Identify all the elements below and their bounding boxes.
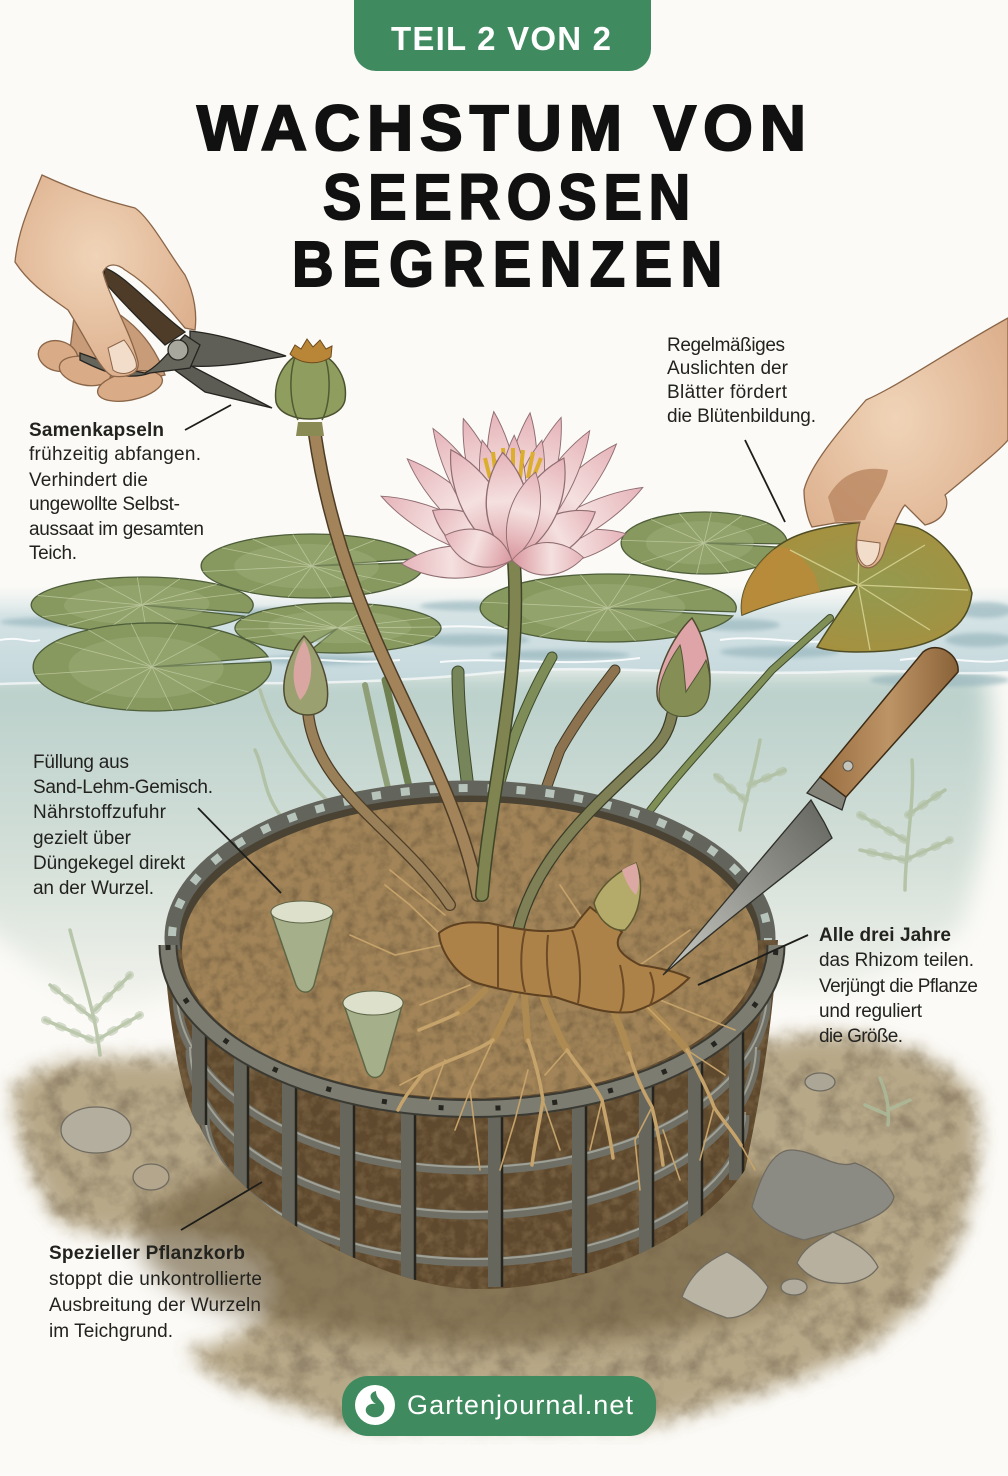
pond floor wash [13,1035,977,1425]
text: Rhizom: die Größe. [819,1026,903,1047]
gold lily leaf [741,522,972,652]
basket back rim [172,788,768,1088]
footer badge [342,1376,656,1436]
text: Samenkapseln [29,420,204,564]
water surface band [0,585,1008,687]
text: Auslichten: Regelmäßiges [667,335,785,356]
text: Auslichten: Auslichten der [667,358,789,379]
text: Pflanzkorb: Spezieller Pflanzkorb [49,1243,245,1264]
left flower bud [284,636,328,715]
title: SEEROSEN [323,161,690,233]
text: Samenkapseln: frühzeitig abfangen. [29,444,201,465]
text: Samenkapseln: ungewollte Selbst- [29,494,180,515]
text: Samenkapseln: aussaat im gesamten [29,519,204,540]
roots [350,870,755,1190]
underwater wash [0,672,991,1004]
hand [15,175,196,377]
left hand with secateurs [15,175,286,408]
text: Rhizom [819,925,978,1047]
text: Füllung: Nährstoffzufuhr [33,802,167,823]
main stems [308,435,672,930]
right hand [804,318,1008,568]
title: WACHSTUM VON [197,92,806,164]
rhizome [439,863,689,1013]
text: Füllung: an der Wurzel. [33,878,154,899]
text: Samenkapseln: Verhindert die [29,470,148,491]
back stems [365,618,830,903]
basket wall [164,940,778,1289]
text: Pflanzkorb [49,1243,262,1342]
lily pads [0,509,794,718]
text: Pflanzkorb: Ausbreitung der Wurzeln [49,1295,261,1316]
right flower bud [657,618,710,717]
fertiliser cones [271,901,403,1078]
thumbnail [108,340,136,374]
basket front rim [168,945,776,1109]
text: Rhizom: das Rhizom teilen. [819,950,974,971]
text: Füllung: Düngekegel direkt [33,853,186,874]
text: Rhizom: und reguliert [819,1001,923,1022]
water lily flower [375,410,650,580]
text: Füllung [33,752,213,899]
basket bars [177,992,767,1287]
text: Rhizom: Verjüngt die Pflanze [819,976,978,997]
stones [61,1073,894,1318]
text: Auslichten: Blätter fördert [667,382,788,403]
thumbnail [857,540,880,566]
text: Pflanzkorb: im Teichgrund. [49,1321,173,1342]
text: Füllung: Füllung aus [33,752,129,773]
text: Pflanzkorb: stoppt die unkontrollierte [49,1269,262,1290]
icon: logo [355,1385,395,1425]
top badge [354,0,651,71]
shaded palm hollow [828,469,888,522]
leader lines [181,405,808,1230]
text: Samenkapseln: Teich. [29,543,77,564]
knife [663,648,958,975]
soil surface [182,802,758,1098]
text: Füllung: gezielt über [33,828,132,849]
planting basket [164,788,778,1289]
text: Rhizom: Alle drei Jahre [819,925,951,946]
secateurs [80,268,286,408]
footer badge: Gartenjournal.net [407,1390,633,1420]
title [197,92,806,300]
text: Samenkapseln: Samenkapseln [29,420,164,441]
text: Füllung: Sand-Lehm-Gemisch. [33,777,213,798]
text: Auslichten [667,335,816,427]
text: Auslichten: die Blütenbildung. [667,406,816,427]
title: BEGRENZEN [292,228,722,300]
underwater sprigs [45,690,950,1125]
fingers behind the tool [35,300,165,407]
seed capsule [276,339,345,436]
top badge: TEIL 2 VON 2 [391,20,611,57]
